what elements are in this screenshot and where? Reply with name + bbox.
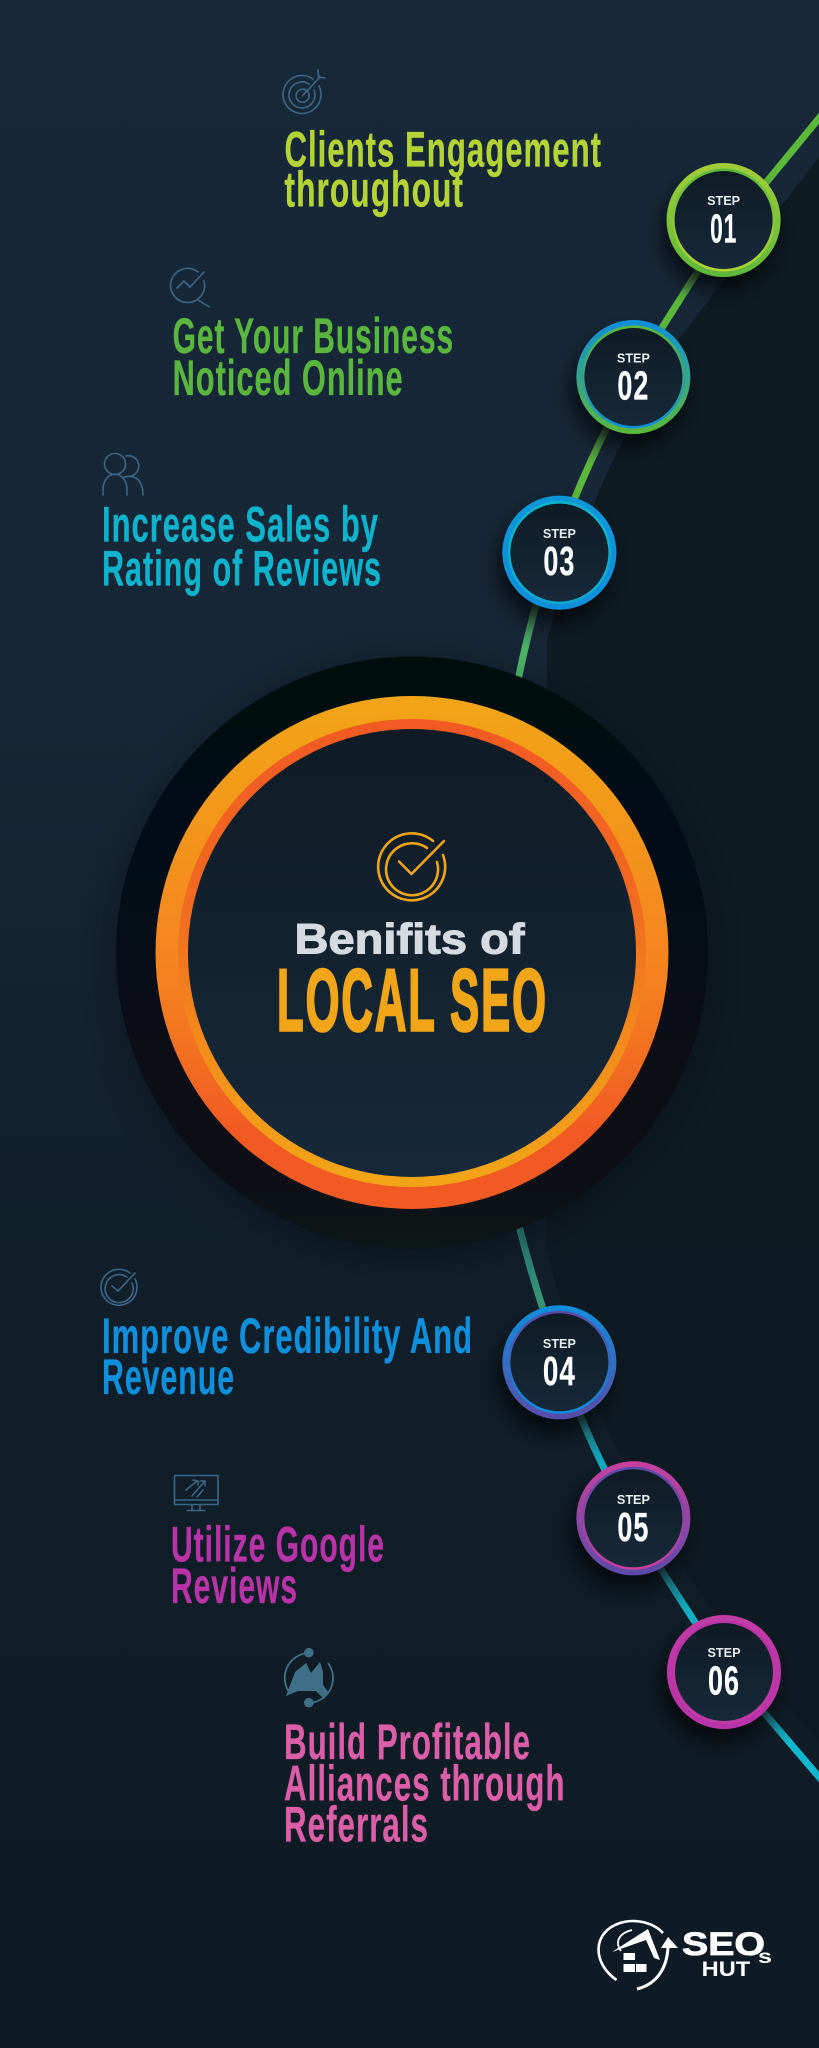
- step 04 badge: 04: [543, 1348, 576, 1394]
- icon: people: [103, 454, 143, 495]
- step 03 badge: STEP: [543, 527, 576, 541]
- step 06 badge: 06: [708, 1658, 740, 1704]
- heading: Noticed Online: Noticed Online: [173, 350, 404, 406]
- step 06 badge: STEP: [708, 1646, 740, 1660]
- item 1: clients engagement: [283, 70, 602, 218]
- step 05 badge: STEP: [617, 1493, 650, 1507]
- logo mark: [599, 1921, 678, 1989]
- heading: Utilize Google: Utilize Google: [171, 1517, 385, 1573]
- step 03 badge: [502, 496, 616, 610]
- item 6: build alliances: [284, 1648, 566, 1853]
- logo text: SEO: SEO: [682, 1926, 765, 1962]
- step 02 badge: [576, 320, 690, 434]
- icon: check in circle: [378, 833, 445, 900]
- logo text: HUT: HUT: [702, 1958, 750, 1981]
- heading: Rating of Reviews: Rating of Reviews: [102, 540, 382, 596]
- heading: Reviews: Reviews: [171, 1558, 298, 1614]
- item 2: get noticed: [171, 268, 454, 406]
- heading: Revenue: Revenue: [102, 1349, 235, 1405]
- step 01 badge: 01: [710, 206, 737, 252]
- logo text: s: s: [758, 1947, 772, 1968]
- step 02 badge: STEP: [617, 351, 650, 365]
- central circle: [116, 656, 708, 1248]
- icon: magnifier chart: [171, 268, 209, 307]
- heading: Clients Engagement: Clients Engagement: [284, 122, 602, 178]
- step 02 badge: 02: [617, 362, 649, 408]
- step 05 badge: [576, 1461, 690, 1575]
- icon: handshake: [285, 1648, 333, 1707]
- step 03 badge: 03: [543, 538, 575, 584]
- item 5: utilize google reviews: [171, 1476, 385, 1614]
- step 04 badge: STEP: [543, 1337, 576, 1351]
- step 01 badge: STEP: [707, 194, 740, 208]
- connector path: [517, 111, 819, 1784]
- heading: Referrals: Referrals: [284, 1797, 429, 1853]
- heading: LOCAL SEO: LOCAL SEO: [277, 950, 548, 1050]
- step 05 badge: 05: [617, 1504, 649, 1550]
- heading: Improve Credibility And: Improve Credibility And: [102, 1308, 473, 1364]
- item 3: increase sales: [102, 454, 382, 596]
- heading: Get Your Business: Get Your Business: [173, 308, 454, 364]
- heading: Build Profitable: Build Profitable: [284, 1714, 531, 1770]
- step 04 badge: [502, 1305, 616, 1419]
- icon: monitor with arrows: [174, 1476, 218, 1510]
- item 4: improve credibility: [101, 1269, 473, 1405]
- dark right region: [547, 157, 819, 1740]
- icon: check ring: [101, 1269, 137, 1305]
- step 06 badge: [667, 1615, 781, 1729]
- heading: Increase Sales by: Increase Sales by: [102, 497, 379, 553]
- icon: target: [283, 70, 325, 113]
- heading: Alliances through: Alliances through: [284, 1756, 566, 1812]
- heading: Benifits of: Benifits of: [294, 916, 525, 964]
- heading: throughout: throughout: [284, 162, 464, 218]
- step 01 badge: [667, 163, 781, 277]
- logo: [599, 1921, 772, 1989]
